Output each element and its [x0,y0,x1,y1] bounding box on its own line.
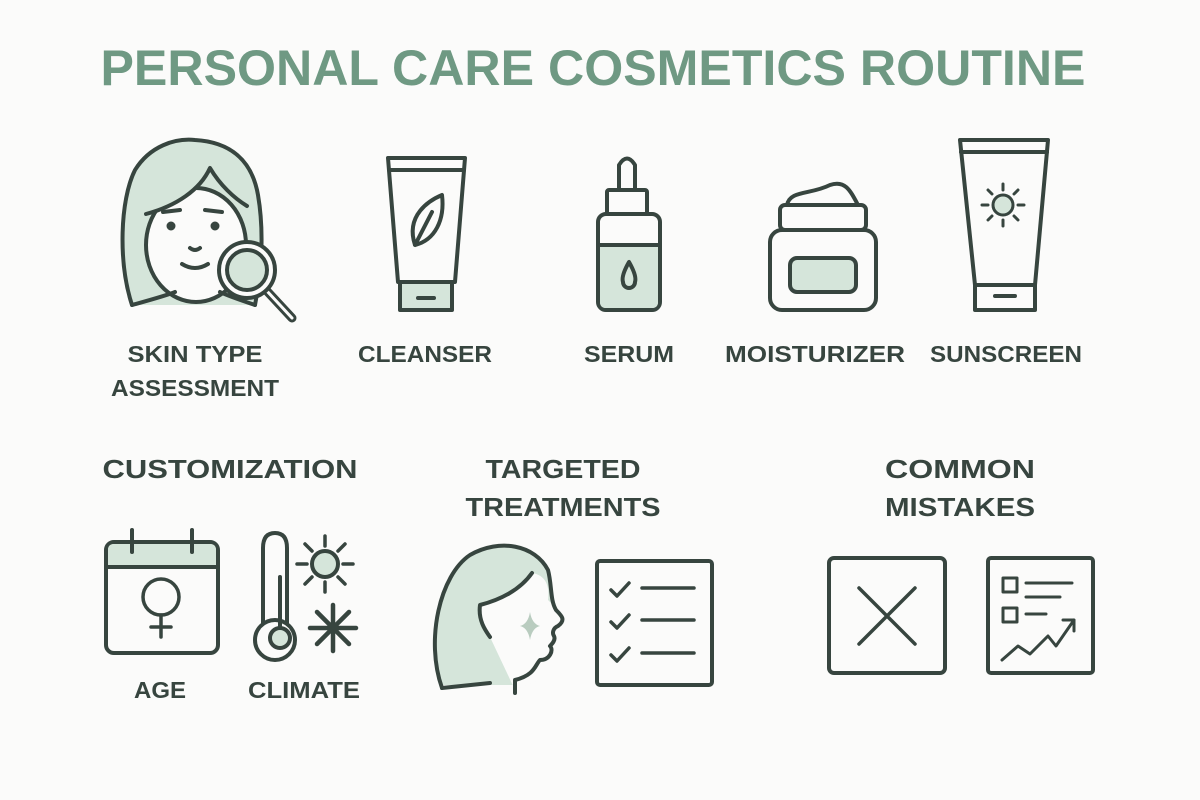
icon: thermometer climate [255,533,356,660]
icon: x box [829,558,945,673]
heading: common mistakes: MISTAKES [885,492,1035,522]
icon: moisturizer jar [770,184,876,310]
label: age: AGE [134,677,186,703]
label: moisturizer: MOISTURIZER [725,341,905,367]
heading: common mistakes: COMMON [885,454,1035,484]
label: skin type assessment: ASSESSMENT [111,375,279,401]
heading: targeted treatments: TARGETED [486,454,640,484]
label: sunscreen: SUNSCREEN [930,341,1082,367]
heading: targeted treatments: TREATMENTS [466,492,660,522]
heading: common mistakes [885,454,1035,522]
icon: serum bottle [598,158,660,310]
label: climate: CLIMATE [248,677,360,703]
label: skin type assessment [111,341,279,401]
icon: skin type assessment face [123,140,292,318]
title: PERSONAL CARE COSMETICS ROUTINE [100,40,1086,96]
label: cleanser: CLEANSER [358,341,492,367]
label: serum: SERUM [584,341,674,367]
heading: targeted treatments [466,454,660,522]
heading: customization: CUSTOMIZATION [102,454,358,484]
icon: calendar age [106,530,218,653]
icon: checklist [597,561,712,685]
icon: chart box [988,558,1093,673]
icon: sunscreen tube [960,140,1048,310]
label: skin type assessment: SKIN TYPE [128,341,262,367]
icon: cleanser tube [388,158,465,310]
icon: profile head [435,546,563,693]
